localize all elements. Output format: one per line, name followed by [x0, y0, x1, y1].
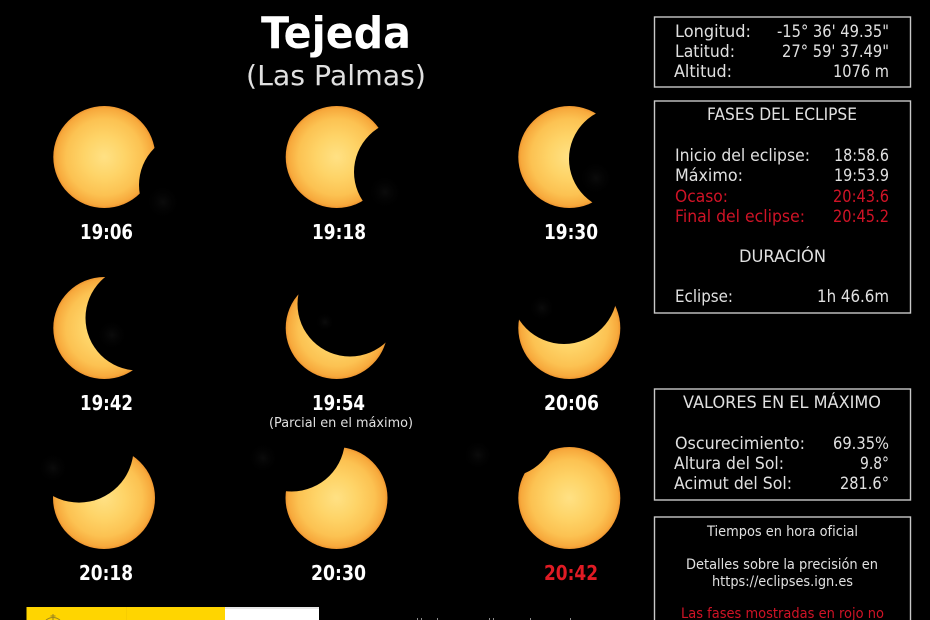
- time label 20:30: 20:30: [311, 561, 366, 585]
- panel: notes: Detalles sobre la precisión en: [686, 557, 878, 573]
- panel: eclipse phases: [654, 101, 910, 313]
- time label 19:18: 19:18: [312, 220, 366, 244]
- panel: eclipse phases: FASES DEL ECLIPSE: [707, 105, 857, 124]
- time label 20:18: 20:18: [79, 561, 133, 585]
- panel: eclipse phases: DURACIÓN: [739, 247, 826, 266]
- eclipse phase 20:42: [476, 447, 620, 549]
- panel: eclipse phases: 18:58.6: [834, 146, 889, 165]
- panel: values at maximum: 9.8°: [860, 454, 889, 473]
- panel: coordinates: -15° 36' 49.35": [777, 22, 889, 41]
- panel: notes: [654, 517, 910, 620]
- time label 20:42 (red): 20:42: [544, 561, 598, 585]
- panel: values at maximum: 281.6°: [840, 474, 889, 493]
- logo band: [26, 607, 319, 620]
- panel: values at maximum: [654, 389, 910, 500]
- eclipse phase 19:06: [53, 106, 165, 208]
- panel: coordinates: 27° 59' 37.49": [782, 42, 889, 61]
- eclipse phase 20:30: [260, 448, 388, 549]
- panel: notes: https://eclipses.ign.es: [712, 574, 853, 590]
- eclipse phase 19:42: [53, 277, 133, 379]
- panel: values at maximum: Altura del Sol:: [674, 454, 784, 473]
- panel: eclipse phases: 19:53.9: [834, 166, 889, 185]
- panel: coordinates: [654, 17, 910, 87]
- panel: eclipse phases: Eclipse:: [675, 287, 733, 306]
- panel: values at maximum: Acimut del Sol:: [674, 474, 792, 493]
- panel: eclipse phases: Máximo:: [675, 166, 743, 185]
- eclipse phase 19:30: [518, 106, 598, 208]
- panel: eclipse phases: Inicio del eclipse:: [675, 146, 810, 165]
- eclipse phase 19:18: [286, 106, 387, 208]
- subtitle: province: (Las Palmas): [246, 59, 426, 92]
- note: partial at maximum: (Parcial en el máximo): [269, 415, 413, 431]
- panel: values at maximum: 69.35%: [833, 434, 889, 453]
- title: Tejeda: [261, 8, 411, 59]
- time label 19:54: 19:54: [312, 391, 365, 415]
- panel: eclipse phases: 20:45.2: [833, 207, 889, 226]
- cropped caption marks: [417, 618, 571, 620]
- time label 19:06: 19:06: [80, 220, 133, 244]
- panel: coordinates: 1076 m: [833, 62, 889, 81]
- time label 20:06: 20:06: [544, 391, 599, 415]
- panel: values at maximum: VALORES EN EL MÁXIMO: [683, 393, 881, 412]
- panel: coordinates: Altitud:: [674, 62, 732, 81]
- panel: eclipse phases: Ocaso:: [675, 187, 728, 206]
- eclipse phase 19:54 (maximum): [286, 294, 386, 379]
- panel: eclipse phases: Final del eclipse:: [675, 207, 805, 226]
- panel: eclipse phases: 20:43.6: [833, 187, 889, 206]
- time label 19:30: 19:30: [544, 220, 598, 244]
- panel: values at maximum: Oscurecimiento:: [675, 434, 805, 453]
- eclipse phase 20:06: [518, 306, 620, 379]
- panel: eclipse phases: 1h 46.6m: [817, 287, 889, 306]
- time label 19:42: 19:42: [80, 391, 133, 415]
- panel: coordinates: Longitud:: [675, 22, 751, 41]
- panel: notes: Tiempos en hora oficial: [706, 524, 858, 540]
- panel: coordinates: Latitud:: [675, 42, 735, 61]
- eclipse phase 20:18: [50, 456, 155, 549]
